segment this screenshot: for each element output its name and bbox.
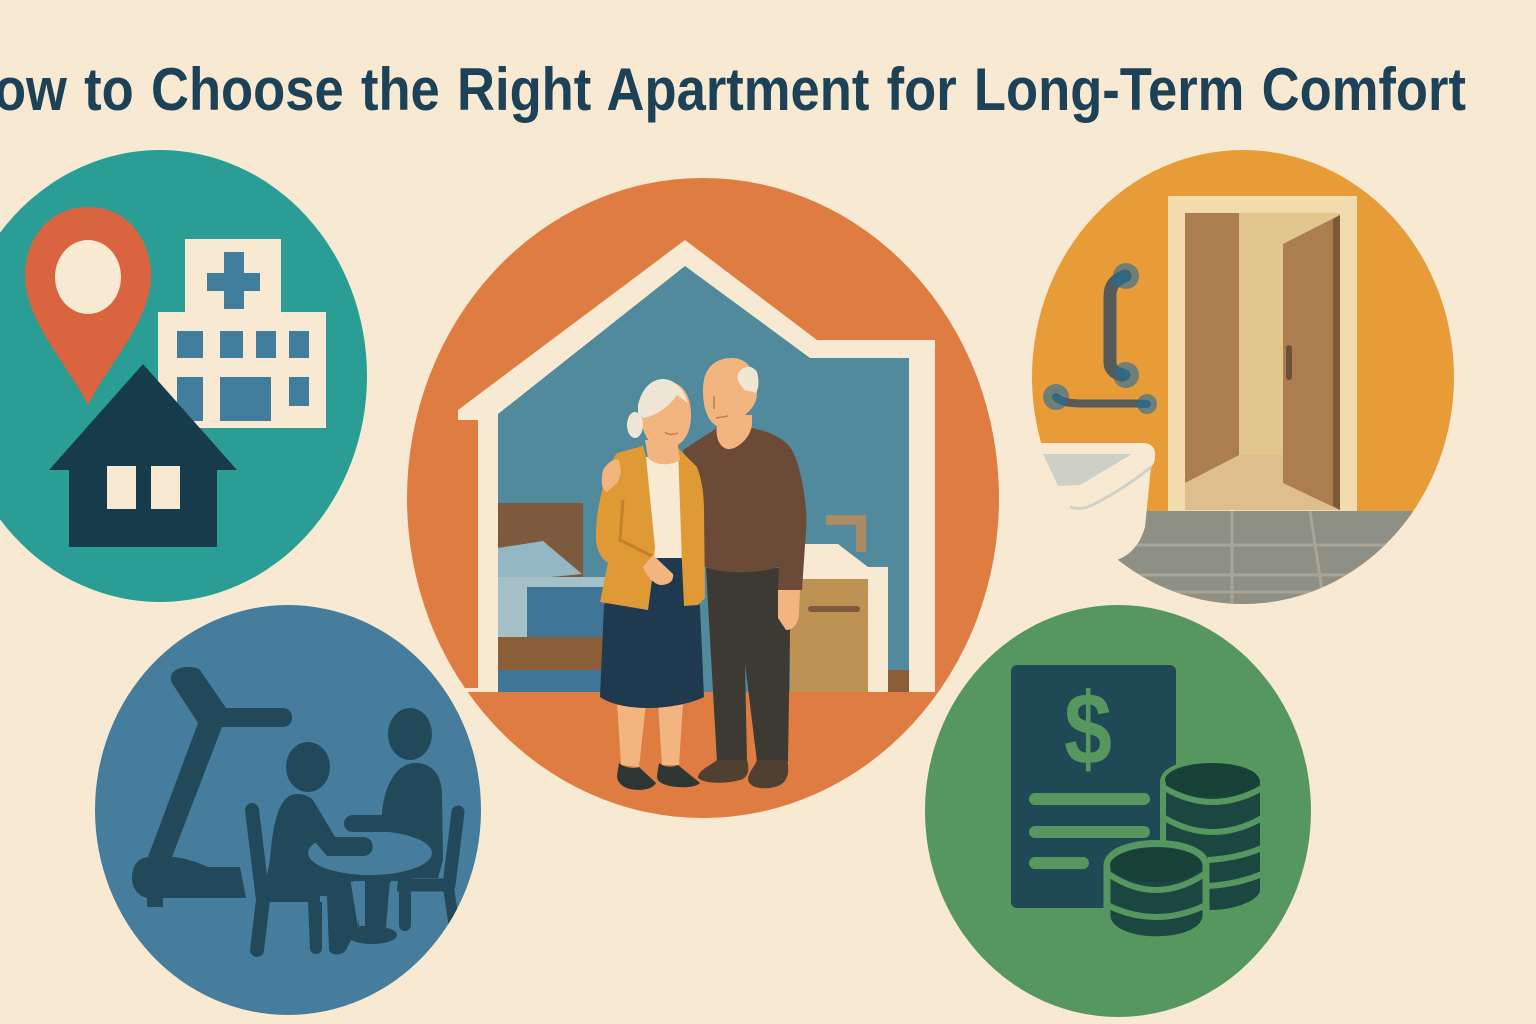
floor edge [452,688,478,692]
icon: arms on table [313,800,404,856]
panel: budget and costs [925,605,1311,1017]
floor tiles [1118,511,1414,604]
icon: bill with dollar sign [1011,665,1176,908]
panel: amenities and social life [95,605,481,1015]
icon: house [49,364,237,547]
icon: short coin stack [1107,844,1206,940]
icon: horizontal grab bar [1043,384,1157,414]
icon: toilet [1030,443,1155,575]
house interior [497,266,909,692]
icon: map pin [25,207,151,405]
icon: round table [306,831,436,944]
panel: couple at home [407,178,999,818]
panel: location and healthcare [0,150,367,602]
woman [596,379,705,790]
icon: right chair [398,812,458,930]
house outline [458,240,935,692]
icon: open doorway [1168,196,1357,511]
icon: hospital [158,239,326,428]
icon: left chair [252,810,263,950]
panel: accessible bathroom and door [1030,150,1460,610]
furniture: bed [498,503,610,692]
icon: bill with dollar sign: $ [1064,672,1112,786]
icon: seated person right [382,708,443,878]
man [683,358,806,788]
icon: seated person left [262,742,358,954]
icon: vertical grab bar [1110,263,1139,388]
furniture: nightstand and bed end [790,515,909,692]
icon: tall coin stack [1163,762,1264,913]
icon: treadmill [132,667,292,907]
